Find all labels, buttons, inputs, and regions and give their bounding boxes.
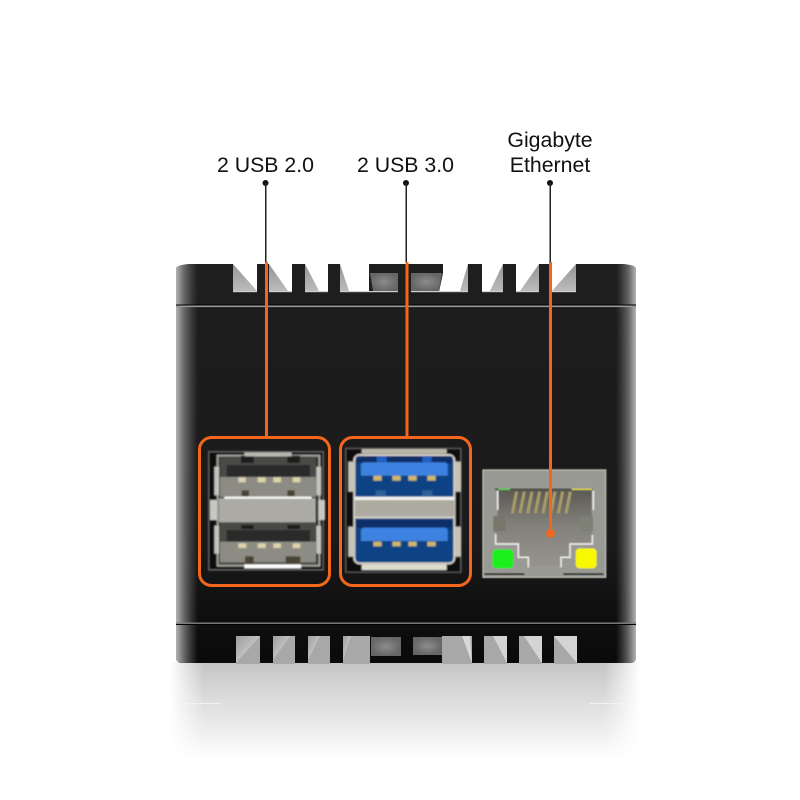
bottom fins bbox=[236, 636, 577, 664]
outer frame bbox=[209, 452, 323, 570]
outer frame bbox=[346, 448, 461, 572]
Ethernet port bbox=[483, 470, 606, 577]
white notch openings bbox=[233, 264, 576, 292]
callout: USB 2.0 highlight box bbox=[200, 438, 330, 586]
metal shell bbox=[354, 455, 454, 563]
label: Gigabyte Ethernet: Gigabyte bbox=[507, 128, 593, 152]
USB 2.0 ports bbox=[209, 452, 325, 570]
lower USB 3.0 port bbox=[356, 520, 452, 562]
green LED bbox=[492, 549, 513, 568]
label: 2 USB 2.0: 2 USB 2.0 bbox=[217, 153, 314, 177]
housing shell bbox=[176, 264, 636, 663]
yellow LED bbox=[576, 548, 597, 568]
gold contact pins bbox=[512, 492, 570, 513]
notch floor highlights bbox=[233, 291, 576, 292]
bottom vent windows bbox=[370, 636, 442, 663]
top vent windows bbox=[370, 273, 442, 291]
upper USB 3.0 port bbox=[356, 456, 452, 497]
center metal bar bbox=[210, 497, 325, 522]
label: Gigabyte Ethernet bbox=[507, 128, 593, 177]
center metal bar bbox=[355, 497, 454, 518]
callout: USB 3.0 highlight box bbox=[340, 438, 470, 586]
bottom shadow lines bbox=[484, 573, 603, 575]
side edge highlights bbox=[176, 264, 636, 663]
leader line: Ethernet bbox=[546, 180, 555, 538]
shell tabs bbox=[348, 449, 461, 570]
label: 2 USB 3.0: 2 USB 3.0 bbox=[357, 153, 454, 177]
dark top fin blocks bbox=[257, 264, 552, 293]
floor reflection bbox=[170, 662, 640, 760]
leader line: USB 2.0 bbox=[262, 180, 268, 437]
device body bbox=[176, 264, 636, 664]
USB 3.0 ports bbox=[346, 448, 461, 572]
label: Gigabyte Ethernet: Ethernet bbox=[510, 153, 590, 177]
metal shell bbox=[218, 456, 319, 566]
metal faceplate bbox=[483, 470, 606, 577]
housing seams bbox=[176, 304, 636, 625]
upper USB 2.0 port bbox=[220, 456, 316, 498]
socket outline bbox=[495, 489, 593, 567]
top fin shading bbox=[233, 264, 576, 291]
shell tabs bbox=[214, 452, 321, 568]
socket opening bbox=[496, 490, 592, 567]
leader line: USB 3.0 bbox=[403, 180, 409, 437]
lower USB 2.0 port bbox=[220, 522, 316, 564]
side latches bbox=[493, 516, 593, 531]
